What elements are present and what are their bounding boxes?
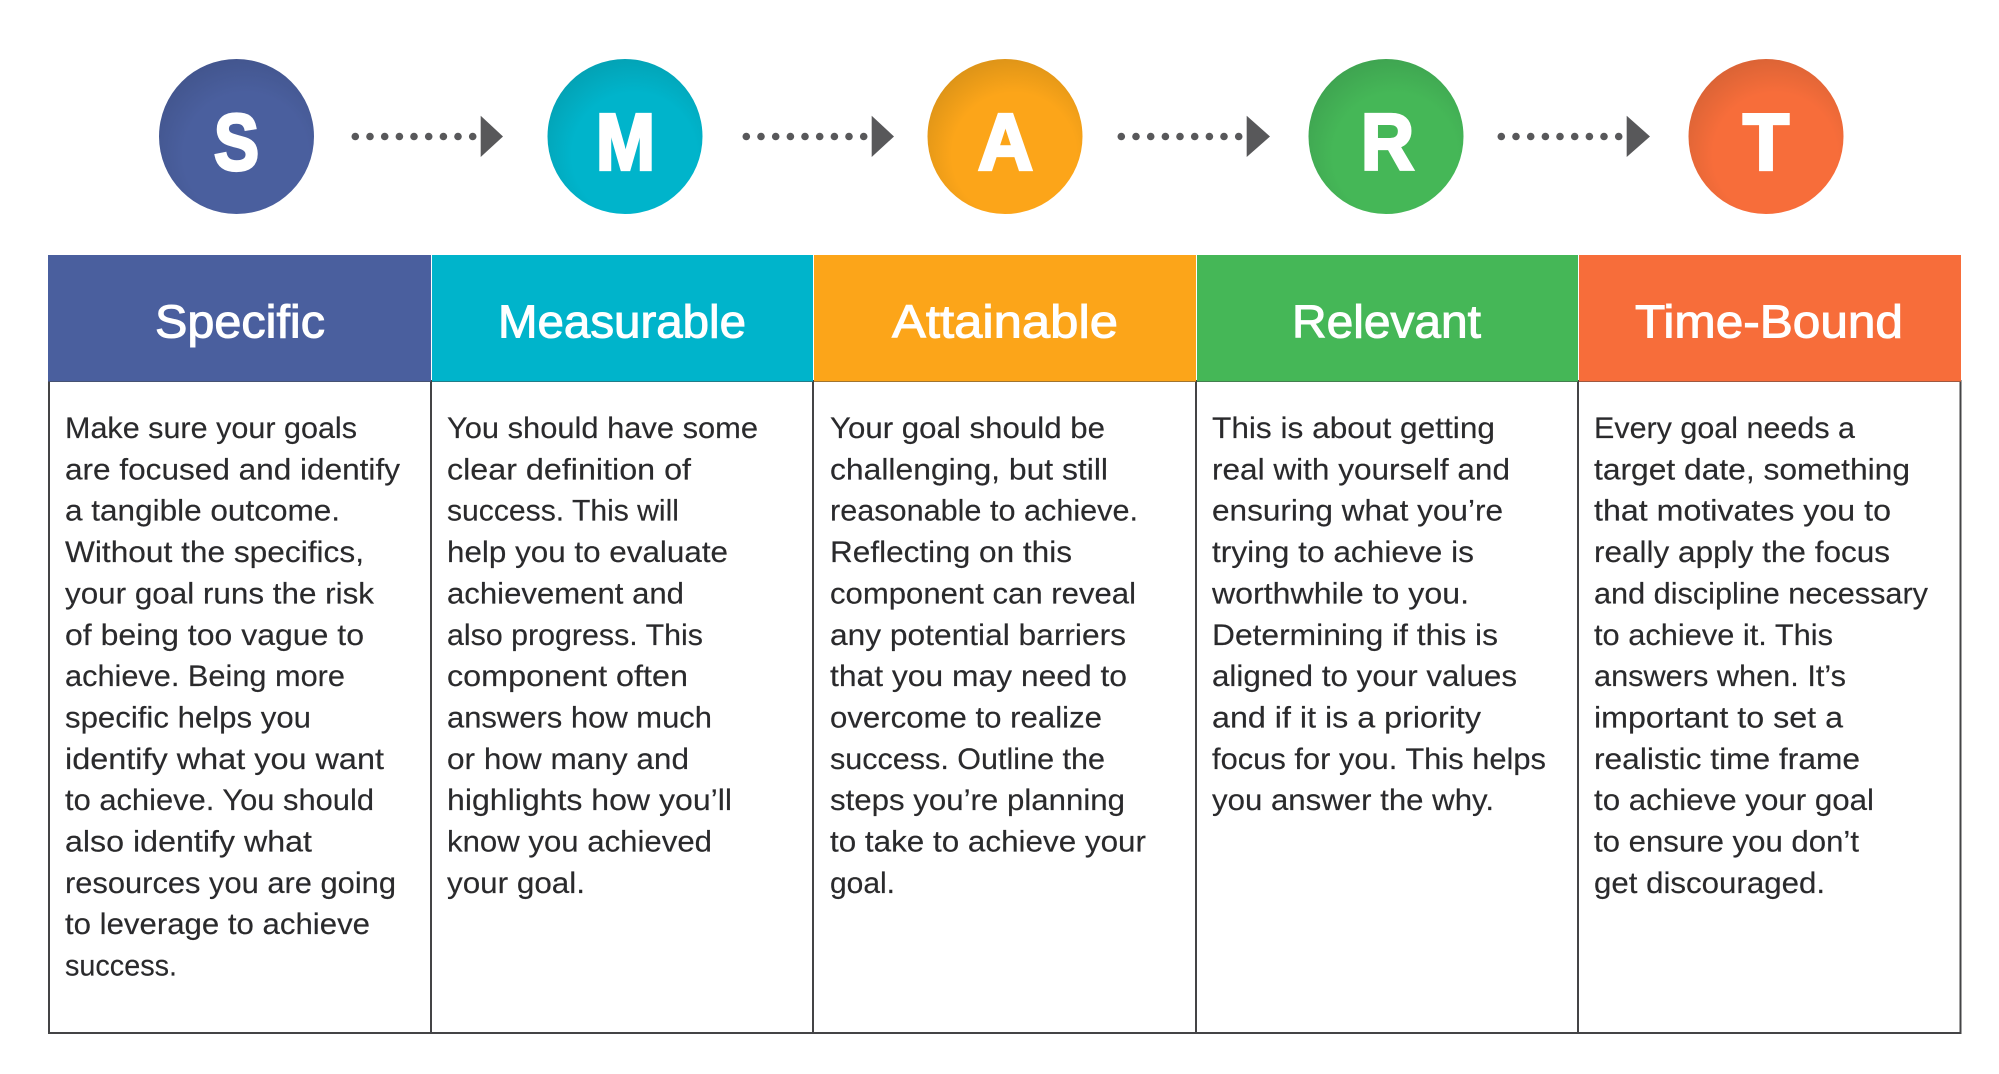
text block: Measurable: highlights how you’ll: [447, 784, 732, 817]
icon: A circle: [928, 59, 1082, 214]
text block: Attainable: component can reveal: [830, 577, 1136, 610]
text block: Measurable: component often: [447, 660, 688, 693]
text block: Time-Bound: [1594, 412, 1928, 900]
text block: Relevant: ensuring what you’re: [1212, 495, 1503, 528]
text block: Attainable: [830, 412, 1146, 900]
panel: Time-Bound header: Time-Bound: [1635, 296, 1903, 348]
icon: T circle: [1688, 59, 1844, 214]
panel: Relevant header: Relevant: [1292, 296, 1481, 348]
text block: Time-Bound: really apply the focus: [1594, 536, 1890, 569]
text block: Specific: Make sure your goals: [65, 412, 357, 445]
text block: Relevant: real with yourself and: [1212, 453, 1510, 486]
panel: Measurable header: [432, 255, 813, 382]
panel: Specific header: Specific: [155, 296, 325, 348]
text block: Specific: to leverage to achieve: [65, 908, 370, 941]
text block: Measurable: achievement and: [447, 577, 684, 610]
text block: Specific: to achieve. You should: [65, 784, 374, 817]
icon: R circle: [1308, 59, 1464, 214]
text block: Attainable: goal.: [830, 867, 895, 900]
panel: Attainable header: [814, 255, 1196, 382]
icon: S circle: S: [214, 98, 259, 186]
panel: Time-Bound header: [1579, 255, 1961, 382]
text block: Attainable: reasonable to achieve.: [830, 495, 1138, 528]
text block: Measurable: help you to evaluate: [447, 536, 728, 569]
text block: Attainable: Your goal should be: [830, 412, 1105, 445]
text block: Attainable: to take to achieve your: [830, 826, 1146, 858]
text block: Time-Bound: get discouraged.: [1594, 867, 1825, 900]
text block: Specific: achieve. Being more: [65, 660, 345, 693]
text block: Specific: identify what you want: [65, 743, 384, 776]
text block: Specific: resources you are going: [65, 867, 396, 900]
text block: Time-Bound: target date, something: [1594, 453, 1910, 486]
text block: Relevant: Determining if this is: [1212, 619, 1498, 652]
text block: Attainable: any potential barriers: [830, 619, 1126, 652]
text block: Time-Bound: Every goal needs a: [1594, 412, 1856, 445]
text block: Measurable: also progress. This: [447, 619, 703, 652]
panel: Relevant header: [1197, 255, 1578, 382]
text block: Specific: Without the specifics,: [65, 536, 364, 569]
panel: Attainable header: Attainable: [892, 296, 1118, 348]
text block: Time-Bound: answers when. It’s: [1594, 660, 1846, 693]
text block: Measurable: know you achieved: [447, 826, 712, 858]
text block: Measurable: or how many and: [447, 743, 689, 776]
text block: Attainable: success. Outline the: [830, 743, 1105, 776]
text block: Attainable: steps you’re planning: [830, 784, 1125, 817]
text block: Time-Bound: realistic time frame: [1594, 743, 1860, 776]
text block: Measurable: answers how much: [447, 702, 712, 734]
panel: table frame: [49, 381, 1960, 1033]
text block: Specific: specific helps you: [65, 702, 311, 734]
text block: Time-Bound: important to set a: [1594, 702, 1844, 734]
text block: Attainable: challenging, but still: [830, 453, 1108, 486]
text block: Specific: also identify what: [65, 826, 312, 858]
text block: Attainable: that you may need to: [830, 660, 1127, 693]
icon: M circle: [548, 59, 702, 214]
text block: Specific: a tangible outcome.: [65, 495, 340, 528]
text block: Relevant: focus for you. This helps: [1212, 743, 1546, 776]
text block: Time-Bound: to achieve it. This: [1594, 619, 1833, 652]
text block: Specific: [65, 412, 400, 983]
panel: Specific header: [48, 255, 431, 382]
text block: Time-Bound: to ensure you don’t: [1594, 826, 1859, 858]
text block: Relevant: [1211, 412, 1546, 817]
arrow: R to T: [1498, 116, 1650, 157]
text block: Measurable: success. This will: [447, 495, 679, 528]
text block: Relevant: worthwhile to you.: [1211, 577, 1469, 610]
text block: Time-Bound: and discipline necessary: [1594, 577, 1928, 610]
text block: Relevant: aligned to your values: [1212, 660, 1517, 693]
arrow: M to A: [742, 116, 894, 157]
icon: T circle: T: [1743, 98, 1789, 186]
arrow: S to M: [352, 116, 503, 157]
text block: Specific: of being too vague to: [65, 619, 364, 652]
icon: M circle: M: [596, 98, 655, 186]
text block: Relevant: and if it is a priority: [1212, 702, 1481, 734]
text block: Measurable: [447, 412, 758, 900]
text block: Specific: your goal runs the risk: [65, 577, 374, 610]
text block: Measurable: clear definition of: [447, 453, 692, 486]
arrow: A to R: [1118, 116, 1270, 157]
text block: Relevant: trying to achieve is: [1212, 536, 1474, 569]
text block: Specific: are focused and identify: [65, 453, 400, 486]
text block: Time-Bound: that motivates you to: [1594, 495, 1891, 528]
text block: Measurable: You should have some: [447, 412, 758, 445]
text block: Time-Bound: to achieve your goal: [1594, 784, 1874, 817]
text block: Attainable: overcome to realize: [830, 702, 1102, 734]
icon: R circle: R: [1361, 98, 1414, 186]
text block: Attainable: Reflecting on this: [830, 536, 1072, 569]
text block: Relevant: This is about getting: [1212, 412, 1495, 445]
panel: Measurable header: Measurable: [498, 296, 746, 348]
text block: Measurable: your goal.: [447, 867, 585, 900]
text block: Specific: success.: [65, 950, 177, 983]
icon: A circle: A: [978, 98, 1033, 186]
text block: Relevant: you answer the why.: [1212, 784, 1494, 817]
icon: S circle: [159, 59, 314, 214]
